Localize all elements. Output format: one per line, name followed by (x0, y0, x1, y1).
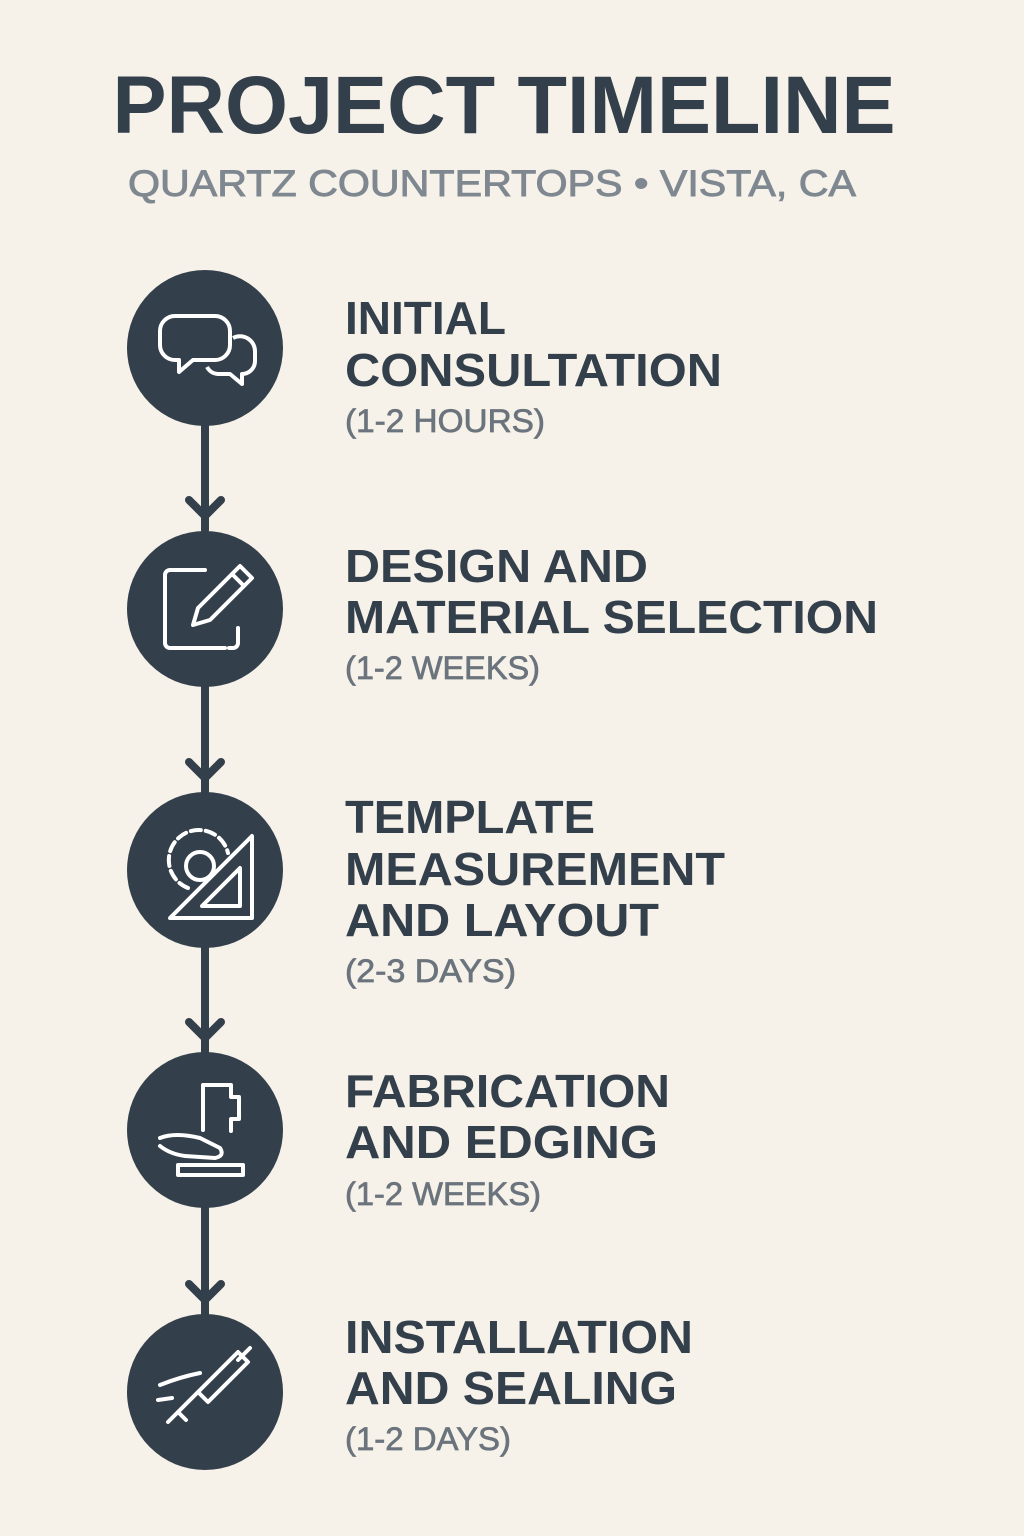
icon: pencil on paper (127, 531, 283, 687)
text: step 3: AND LAYOUT (345, 894, 659, 946)
text: step 4: FABRICATION (345, 1065, 670, 1117)
icon: chat bubbles (127, 270, 283, 426)
step 1: initial consultation (127, 270, 722, 439)
subtitle: QUARTZ COUNTERTOPS • VISTA, CA (128, 163, 856, 204)
text: step 5: INSTALLATION (345, 1311, 693, 1363)
text: step 1: INITIAL (345, 292, 506, 344)
step 5: installation (127, 1311, 693, 1470)
title: PROJECT TIMELINE (112, 60, 896, 151)
text: step 2: DESIGN AND (345, 540, 648, 592)
text: step 4: (1-2 WEEKS) (345, 1176, 541, 1212)
text: step 4 (345, 1065, 670, 1212)
text: step 3: TEMPLATE (345, 791, 595, 843)
step 4: fabrication (127, 1052, 670, 1212)
text: step 5: (1-2 DAYS) (345, 1421, 511, 1457)
icon: gear and set square (127, 792, 283, 948)
text: step 1: CONSULTATION (345, 344, 722, 396)
text: step 4: AND EDGING (345, 1116, 658, 1168)
timeline connectors (189, 420, 221, 1314)
text: step 5 (345, 1311, 693, 1457)
text: step 3 (345, 791, 725, 989)
text: step 5: AND SEALING (345, 1362, 677, 1414)
text: step 2: (1-2 WEEKS) (345, 650, 540, 686)
text: step 2: MATERIAL SELECTION (345, 591, 878, 643)
text: step 1 (345, 292, 722, 439)
step 3: template measurement (127, 791, 725, 989)
icon: caulk gun (127, 1314, 283, 1470)
text: step 2 (345, 540, 878, 686)
step 2: design and material selection (127, 531, 878, 687)
text: step 1: (1-2 HOURS) (345, 403, 545, 439)
text: step 3: MEASUREMENT (345, 843, 725, 895)
icon: cutting machine (127, 1052, 283, 1208)
text: step 3: (2-3 DAYS) (345, 953, 516, 989)
